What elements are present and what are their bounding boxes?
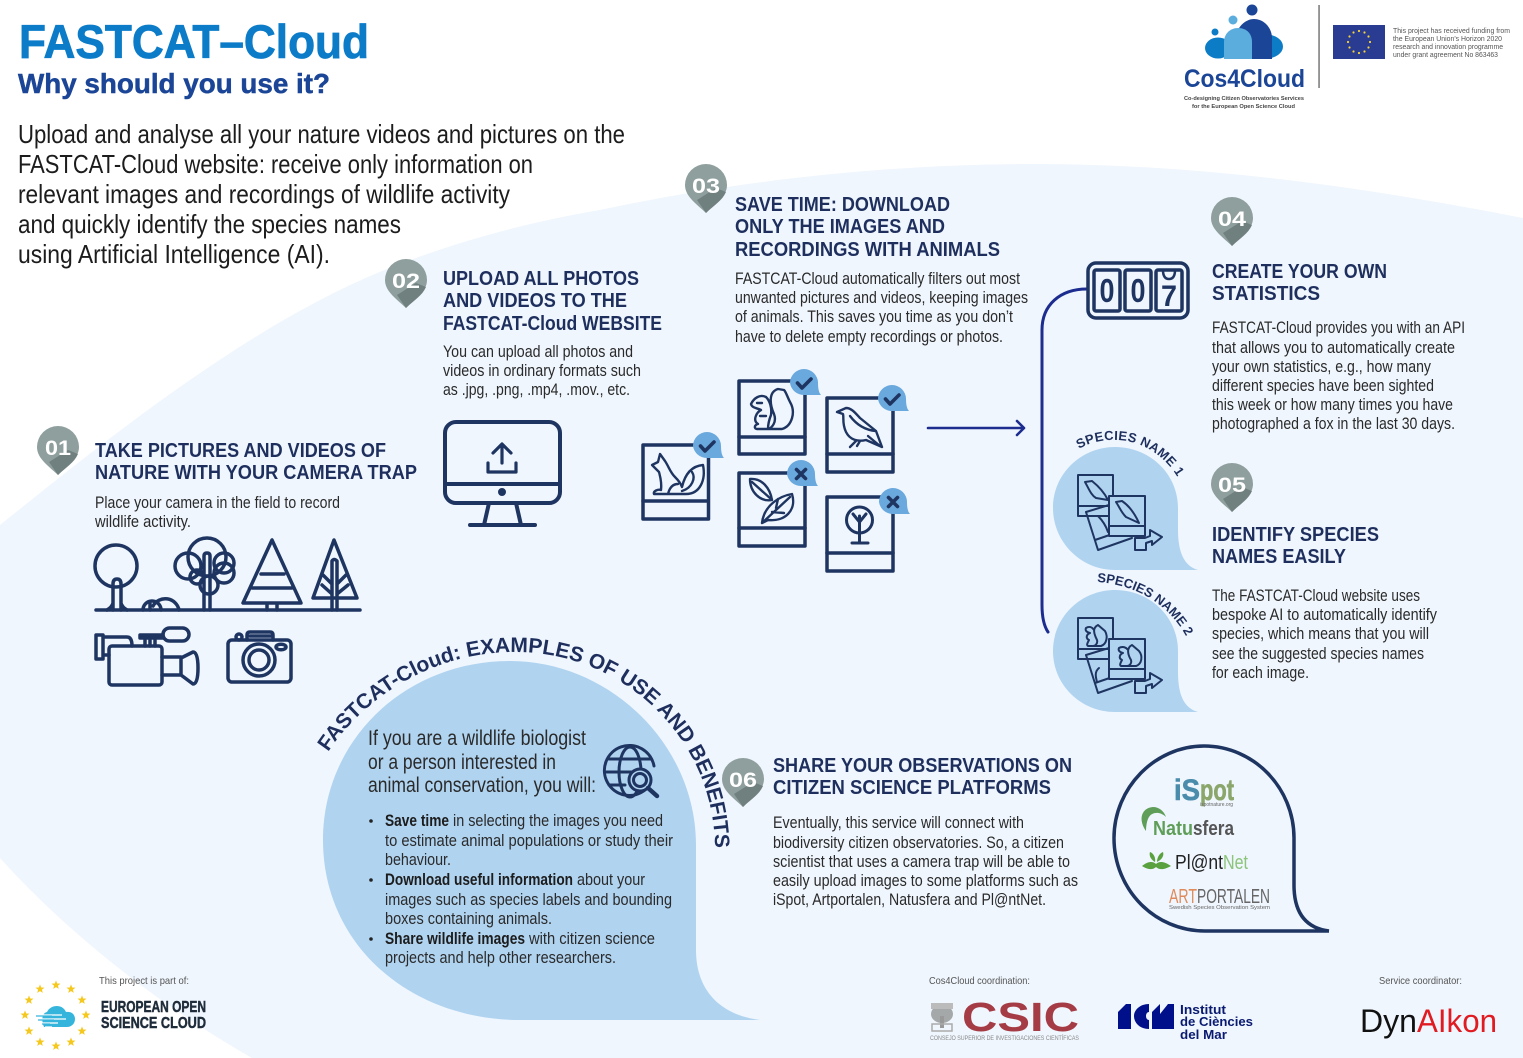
logo: Institut de Ciències del Mar: de Ciències (1180, 1014, 1253, 1029)
footer: European Open Science Cloud (20, 975, 206, 1050)
step 03: unwanted pictures and videos, keeping images (735, 289, 1028, 307)
logo: Institut de Ciències del Mar: del Mar (1180, 1027, 1227, 1042)
step 05: NAMES EASILY (1212, 546, 1347, 568)
pin 02: 02 (392, 270, 420, 293)
step 03: ONLY THE IMAGES AND (735, 216, 945, 238)
step 06: Eventually, this service will connect with (773, 814, 1024, 832)
Cos4Cloud logo: Cos4Cloud (1184, 65, 1305, 93)
image card: squirrel, accepted (739, 369, 821, 454)
pin 01: 01 (45, 437, 71, 460)
logo: PlantNet (1142, 852, 1248, 874)
step 02: AND VIDEOS TO THE (443, 290, 627, 312)
step 04: this week or how many times you have (1212, 396, 1453, 414)
lead text: or a person interested in (368, 750, 556, 774)
panel: examples of use and benefits (317, 638, 760, 1020)
pin 03: 03 (692, 175, 720, 198)
species bubble 2 (1053, 573, 1198, 712)
intro text: and quickly identify the species names (18, 209, 401, 239)
logo: Artportalen: PORTALEN (1197, 886, 1270, 908)
step 06: scientist that uses a camera trap will be able to (773, 853, 1070, 871)
step 05: IDENTIFY SPECIES (1212, 524, 1379, 546)
step 05: The FASTCAT-Cloud website uses (1212, 587, 1420, 605)
step 01: wildlife activity. (94, 513, 191, 531)
logo: Artportalen: Swedish Species Observation System (1169, 905, 1270, 911)
step 04: photographed a fox in the last 30 days. (1212, 415, 1455, 433)
icon: video camera (96, 628, 198, 685)
Cos4Cloud logo (1184, 4, 1305, 110)
species bubble 2: SPECIES NAME 2 (1098, 573, 1193, 636)
intro text: using Artificial Intelligence (AI). (18, 239, 330, 269)
step 05 (1211, 463, 1438, 682)
logo: iSpot (1174, 774, 1234, 808)
EU flag and funding note: research and innovation programme (1393, 44, 1503, 51)
step 04: different species have been sighted (1212, 377, 1434, 395)
bullet list: Download useful information (385, 871, 573, 889)
lead text: animal conservation, you will: (368, 773, 596, 797)
icon: counter 007 (1088, 263, 1188, 318)
logo: EOSC stars and cloud (20, 980, 90, 1050)
icon: counter 007: 7 (1161, 280, 1177, 313)
logo: DynAIkon: Dyn (1360, 1003, 1417, 1039)
pin 05 (1211, 463, 1253, 512)
platform logos bubble (1114, 746, 1329, 931)
bullet list: images such as species labels and bounding (385, 891, 672, 909)
pin 02 (385, 259, 427, 308)
image card: tree, rejected (827, 488, 910, 571)
step 01 (37, 426, 417, 685)
step 04: CREATE YOUR OWN (1212, 261, 1387, 283)
curved heading: FASTCAT-Cloud: EXAMPLES OF USE AND BENEFITS (317, 638, 730, 848)
intro text: FASTCAT-Cloud website: receive only information on (18, 149, 533, 179)
icon: bird photos (1078, 475, 1162, 550)
step 06: iSpot, Artportalen, Natusfera and Pl@ntNet. (773, 891, 1046, 909)
bullet list: about your (577, 871, 645, 889)
EU flag and funding note: under grant agreement No 863463 (1393, 52, 1498, 59)
step 06: easily upload images to some platforms such as (773, 872, 1078, 890)
bullet list: behaviour. (385, 851, 451, 869)
logo: CSIC: CSIC (962, 994, 1079, 1040)
footer: Cos4Cloud coordination (929, 975, 1253, 1042)
lead text (368, 726, 596, 797)
step 06 (722, 755, 1078, 909)
footer: European Open Science Cloud: EUROPEAN OPEN (101, 999, 206, 1016)
step 03: FASTCAT-Cloud automatically filters out most (735, 270, 1020, 288)
icon: landscape with trees (95, 538, 360, 610)
title: FASTCAT–Cloud (19, 15, 369, 68)
logo: iSpot: iS (1174, 774, 1200, 807)
logo: CSIC: CONSEJO SUPERIOR DE INVESTIGACIONES CIENTÍFICAS (930, 1035, 1079, 1042)
step 04: STATISTICS (1212, 283, 1320, 305)
step 02: FASTCAT-Cloud WEBSITE (443, 313, 662, 335)
image card: bird, accepted (827, 385, 909, 472)
step 01: NATURE WITH YOUR CAMERA TRAP (95, 462, 417, 484)
bullet list: with citizen science (528, 930, 655, 948)
bullet list: Share wildlife images (385, 930, 525, 948)
species bubble 1: SPECIES NAME 1 (1076, 430, 1184, 476)
footer: service coordinator: Service coordinator: (1379, 975, 1462, 987)
step 05: see the suggested species names (1212, 645, 1424, 663)
logo: iSpot: pot (1200, 774, 1234, 807)
footer: European Open Science Cloud: This project is part of: (99, 975, 189, 987)
bullet list: projects and help other researchers. (385, 949, 616, 967)
pin 03 (685, 164, 727, 213)
step 03: SAVE TIME: DOWNLOAD (735, 194, 950, 216)
step 06: CITIZEN SCIENCE PLATFORMS (773, 777, 1051, 799)
Cos4Cloud logo: Co-designing Citizen Observatories Services (1184, 96, 1304, 102)
step 03 (643, 164, 1028, 571)
step 04: FASTCAT-Cloud provides you with an API (1212, 319, 1465, 337)
footer: service coordinator (1360, 975, 1497, 1039)
step 03: have to delete empty recordings or photos. (735, 328, 1003, 346)
step 02: videos in ordinary formats such (443, 362, 641, 380)
bullet list (369, 812, 673, 967)
step 05: bespoke AI to automatically identify (1212, 606, 1438, 624)
pin 06: 06 (729, 769, 757, 792)
step 02: You can upload all photos and (443, 343, 633, 361)
bullet list: Save time (385, 812, 449, 830)
bullet list: in selecting the images you need (453, 812, 663, 830)
step 02: UPLOAD ALL PHOTOS (443, 268, 639, 290)
icon: counter 007: 0 (1130, 272, 1146, 309)
intro text: Upload and analyse all your nature videos and pictures on the (18, 119, 625, 149)
Cos4Cloud logo: for the European Open Science Cloud (1192, 104, 1295, 110)
logo: PlantNet: Pl@nt (1175, 852, 1223, 874)
bullet list: to estimate animal populations or study their (385, 832, 673, 850)
logo: iSpot: ispotnature.org (1200, 802, 1233, 808)
lead text: If you are a wildlife biologist (368, 726, 586, 750)
footer: European Open Science Cloud: SCIENCE CLOUD (101, 1015, 206, 1032)
step 01: Place your camera in the field to record (95, 494, 340, 512)
pin 01 (37, 426, 79, 475)
EU flag and funding note: the European Union's Horizon 2020 (1393, 36, 1502, 43)
pin 04: 04 (1218, 208, 1246, 231)
step 05: species, which means that you will (1212, 625, 1429, 643)
step 04: your own statistics, e.g., how many (1212, 358, 1432, 376)
connector bracket (1042, 289, 1087, 632)
pin 04 (1211, 197, 1253, 246)
intro text (18, 119, 625, 269)
icon: monitor with upload arrow (445, 422, 560, 525)
logo: CSIC (930, 994, 1079, 1042)
logo: Institut de Ciències del Mar (1118, 1002, 1253, 1042)
step 01: TAKE PICTURES AND VIDEOS OF (95, 440, 386, 462)
EU flag and funding note (1318, 5, 1510, 88)
bullet list: boxes containing animals. (385, 910, 552, 928)
EU flag and funding note: This project has received funding from (1393, 28, 1510, 35)
logo: Natusfera: Natu (1153, 818, 1193, 840)
step 04 (1088, 197, 1465, 433)
logo: DynAIkon: AIkon (1417, 1003, 1497, 1039)
logo: Natusfera: sfera (1193, 818, 1235, 840)
pin 05: 05 (1218, 474, 1246, 497)
footer: Cos4Cloud coordination: Cos4Cloud coordination: (929, 975, 1030, 987)
species bubble 1 (1053, 430, 1198, 570)
icon: photo camera (228, 632, 291, 682)
icon: counter 007: 0 (1100, 272, 1114, 309)
pin 06 (722, 758, 764, 807)
subtitle: Why should you use it? (18, 68, 330, 99)
image card: fox, accepted (643, 432, 724, 519)
image card: leaves, rejected (739, 460, 818, 546)
step 02: as .jpg, .png, .mp4, .mov., etc. (443, 381, 630, 399)
step 03: RECORDINGS WITH ANIMALS (735, 239, 1000, 261)
step 02 (385, 259, 662, 525)
icon: globe with magnifier (604, 745, 657, 797)
step 06: biodiversity citizen observatories. So, a citizen (773, 834, 1064, 852)
icon: squirrel photos (1078, 618, 1162, 693)
arrow to results (928, 421, 1024, 435)
intro text: relevant images and recordings of wildlife activity (18, 179, 510, 209)
logo: Artportalen (1169, 886, 1270, 911)
step 03: of animals. This saves you time as you don’t (735, 308, 1013, 326)
logo: Artportalen: ART (1169, 886, 1197, 908)
logo: Institut de Ciències del Mar: Institut (1180, 1002, 1227, 1017)
logo: Natusfera (1142, 807, 1235, 840)
step 06: SHARE YOUR OBSERVATIONS ON (773, 755, 1072, 777)
step 05: for each image. (1212, 664, 1309, 682)
logo: PlantNet: Net (1223, 852, 1248, 874)
logo: DynAIkon (1360, 1003, 1497, 1039)
step 04: that allows you to automatically create (1212, 339, 1455, 357)
